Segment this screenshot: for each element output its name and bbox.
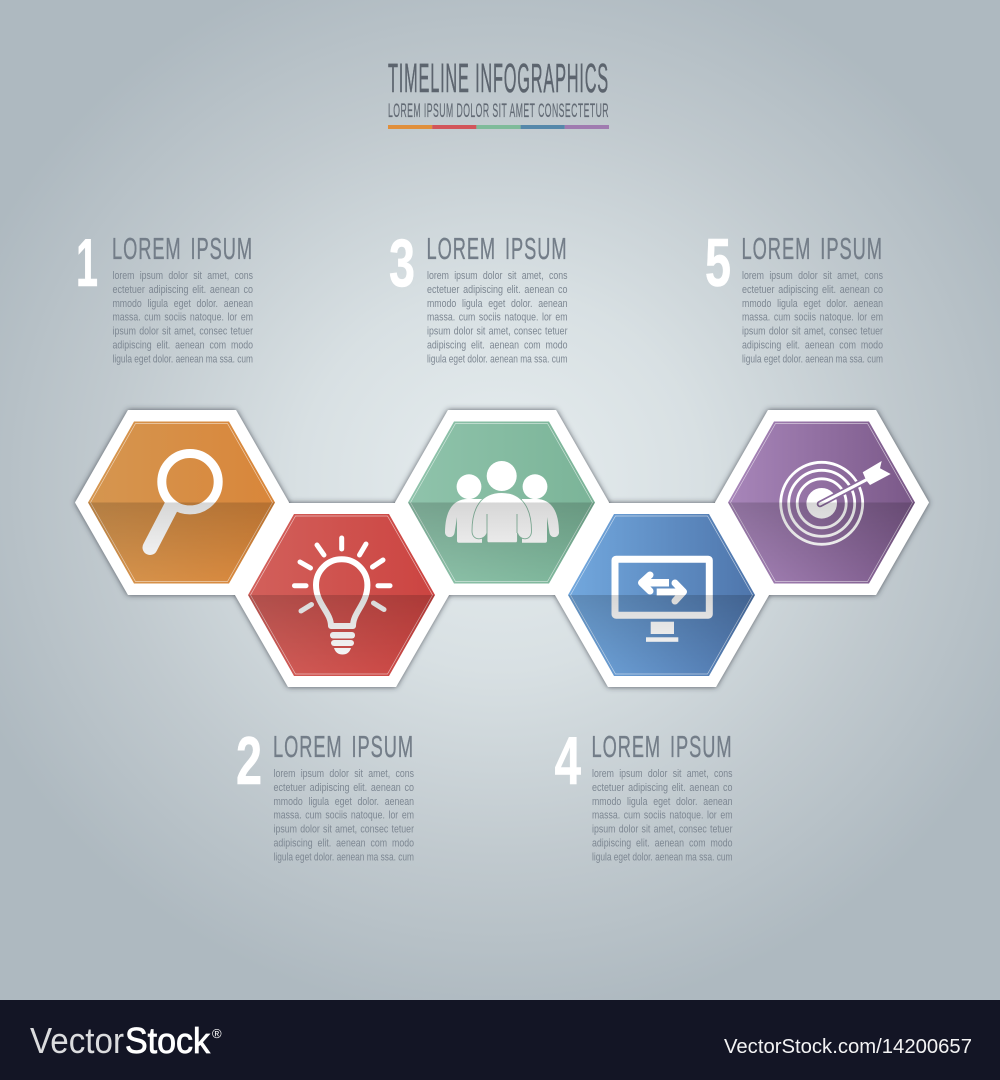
heading 2: LOREM IPSUM xyxy=(273,729,414,764)
body 2: lorem ipsum dolor sit amet, cons xyxy=(274,768,414,780)
logo xyxy=(30,1020,222,1061)
hexagon 1: orange search xyxy=(88,422,275,584)
title block xyxy=(388,55,609,129)
body 1: lorem ipsum dolor sit amet, cons xyxy=(112,270,253,282)
heading 4: LOREM IPSUM xyxy=(592,729,732,764)
source url: VectorStock.com/14200657 xyxy=(724,1036,972,1058)
text: LOREM IPSUM DOLOR SIT AMET CONSECTETUR xyxy=(388,101,609,122)
hexagon 4: blue monitor xyxy=(568,514,755,676)
icon: target with arrow xyxy=(781,461,891,544)
heading 5: LOREM IPSUM xyxy=(742,231,883,266)
body 2: massa. cum sociis natoque. lor em xyxy=(274,810,414,822)
body 5: massa. cum sociis natoque. lor em xyxy=(742,312,883,324)
body 2: mmodo ligula eget dolor. aenean xyxy=(274,796,414,808)
colour rule xyxy=(388,125,609,129)
body 1: mmodo ligula eget dolor. aenean xyxy=(112,298,253,310)
body 3: ligula eget dolor. aenean ma ssa. cum xyxy=(427,353,568,365)
step 1 text xyxy=(76,225,253,365)
body 4 xyxy=(592,768,733,863)
body 4: ectetuer adipiscing elit. aenean co xyxy=(592,782,733,794)
body 3 xyxy=(427,270,568,365)
body 4: adipiscing elit. aenean com modo xyxy=(592,838,733,850)
body 1: ligula eget dolor. aenean ma ssa. cum xyxy=(112,353,253,365)
body 5: ectetuer adipiscing elit. aenean co xyxy=(742,284,883,296)
logo: Stock xyxy=(125,1020,211,1061)
icon: light bulb xyxy=(294,538,390,654)
body 4: ipsum dolor sit amet, consec tetuer xyxy=(592,824,733,836)
step 4 text xyxy=(554,723,733,863)
body 5: lorem ipsum dolor sit amet, cons xyxy=(742,270,883,282)
body 1 xyxy=(112,270,253,365)
body 3: adipiscing elit. aenean com modo xyxy=(427,340,568,352)
body 3: lorem ipsum dolor sit amet, cons xyxy=(427,270,568,282)
body 1: ipsum dolor sit amet, consec tetuer xyxy=(112,326,253,338)
body 5 xyxy=(742,270,883,365)
body 3: mmodo ligula eget dolor. aenean xyxy=(427,298,568,310)
body 4: massa. cum sociis natoque. lor em xyxy=(592,810,733,822)
body 1: adipiscing elit. aenean com modo xyxy=(112,340,253,352)
body 4: lorem ipsum dolor sit amet, cons xyxy=(592,768,732,780)
icon: magnifying glass xyxy=(150,454,218,548)
body 3: ipsum dolor sit amet, consec tetuer xyxy=(427,326,568,338)
body 2: ligula eget dolor. aenean ma ssa. cum xyxy=(274,851,414,863)
body 2: adipiscing elit. aenean com modo xyxy=(274,838,414,850)
body 5: adipiscing elit. aenean com modo xyxy=(742,340,883,352)
heading 1: LOREM IPSUM xyxy=(112,231,253,266)
hexagon 5: purple target xyxy=(728,422,915,584)
body 2 xyxy=(274,768,414,863)
number 2: 2 xyxy=(236,723,262,799)
body 1: massa. cum sociis natoque. lor em xyxy=(112,312,253,324)
number 5: 5 xyxy=(705,225,731,301)
text: TIMELINE INFOGRAPHICS xyxy=(388,55,609,101)
icon: group of people xyxy=(445,461,559,543)
step 2 text xyxy=(236,723,414,863)
number 1: 1 xyxy=(76,225,98,301)
footer band xyxy=(0,1000,1000,1080)
heading 3: LOREM IPSUM xyxy=(426,231,568,266)
step 3 text xyxy=(389,225,568,365)
hexagon 3: green team xyxy=(408,422,595,584)
body 2: ipsum dolor sit amet, consec tetuer xyxy=(274,824,414,836)
logo: Vector xyxy=(30,1020,124,1061)
body 4: ligula eget dolor. aenean ma ssa. cum xyxy=(592,851,733,863)
body 2: ectetuer adipiscing elit. aenean co xyxy=(274,782,414,794)
body 5: ipsum dolor sit amet, consec tetuer xyxy=(742,326,883,338)
hexagon 2: red idea xyxy=(248,514,435,676)
icon: monitor with arrows xyxy=(615,559,709,642)
number 3: 3 xyxy=(389,225,415,301)
white hexagon frames xyxy=(75,410,929,687)
body 5: mmodo ligula eget dolor. aenean xyxy=(742,298,883,310)
number 4: 4 xyxy=(554,723,581,799)
step 5 text xyxy=(705,225,883,365)
body 3: ectetuer adipiscing elit. aenean co xyxy=(427,284,568,296)
body 4: mmodo ligula eget dolor. aenean xyxy=(592,796,733,808)
body 3: massa. cum sociis natoque. lor em xyxy=(427,312,568,324)
body 1: ectetuer adipiscing elit. aenean co xyxy=(112,284,253,296)
body 5: ligula eget dolor. aenean ma ssa. cum xyxy=(742,353,883,365)
logo: ® xyxy=(212,1026,222,1041)
